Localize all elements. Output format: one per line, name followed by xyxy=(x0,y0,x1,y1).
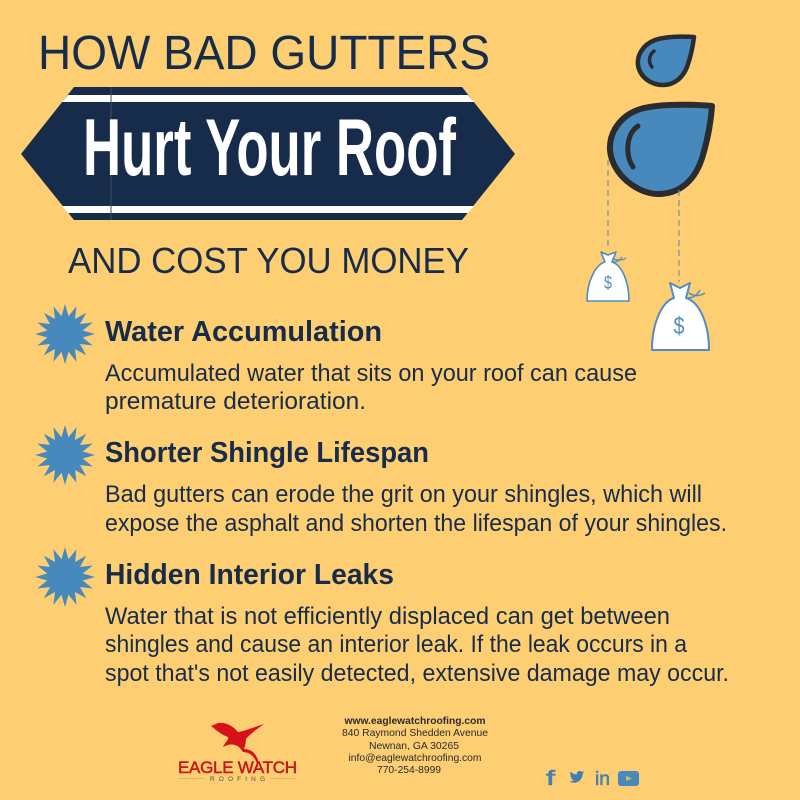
dollar sign small: $ xyxy=(604,273,612,293)
body text: Accumulated water that sits on your roof can cause xyxy=(105,360,637,387)
body text: expose the asphalt and shorten the lifespan of your shingles. xyxy=(105,510,727,537)
heading: Hidden Interior Leaks xyxy=(105,559,394,591)
dashed string right xyxy=(678,190,680,282)
social icons xyxy=(546,768,639,790)
icon: starburst xyxy=(35,304,95,364)
heading: Water Accumulation xyxy=(105,316,382,348)
icon: linkedin: in xyxy=(595,769,610,790)
banner xyxy=(21,87,515,220)
icon: facebook: f xyxy=(546,768,556,790)
contact details xyxy=(342,716,488,776)
item: shorter shingle lifespan xyxy=(35,425,727,537)
dollar sign large: $ xyxy=(674,313,684,340)
contact details: 770-254-8999 xyxy=(377,765,441,776)
body text: Water that is not efficiently displaced can get between xyxy=(105,603,670,630)
body text: Bad gutters can erode the grit on your shingles, which will xyxy=(105,481,702,508)
icon: starburst xyxy=(35,547,95,607)
body text: premature deterioration. xyxy=(105,388,366,415)
logo wordmark: EAGLE WATCH xyxy=(178,758,297,777)
icon: youtube xyxy=(618,771,639,786)
contact details: www.eaglewatchroofing.com xyxy=(344,716,486,727)
heading: Shorter Shingle Lifespan xyxy=(105,437,429,469)
body text xyxy=(105,360,637,415)
icon: small money bag xyxy=(587,252,629,301)
logo tagline: ROOFING xyxy=(210,776,265,783)
item: water accumulation xyxy=(35,304,637,415)
body text xyxy=(105,603,729,687)
banner title text: Hurt Your Roof xyxy=(83,103,457,193)
title: how bad gutters: HOW BAD GUTTERS xyxy=(38,27,490,80)
body text xyxy=(105,481,727,537)
logo: eagle watch roofing xyxy=(178,723,297,783)
icon: starburst xyxy=(35,425,95,485)
icon: small water drop xyxy=(638,37,694,85)
contact details: info@eaglewatchroofing.com xyxy=(348,753,482,764)
body text: spot that's not easily detected, extensive damage may occur. xyxy=(105,660,729,687)
icon: large water drop xyxy=(610,105,712,194)
icon: eagle xyxy=(211,723,264,768)
contact details: 840 Raymond Shedden Avenue xyxy=(342,728,488,739)
item: hidden interior leaks xyxy=(35,547,729,687)
icon: large money bag xyxy=(652,283,709,350)
contact details: Newnan, GA 30265 xyxy=(369,741,459,752)
dashed string left xyxy=(607,160,609,250)
body text: shingles and cause an interior leak. If the leak occurs in a xyxy=(105,631,688,658)
subtitle: and cost you money: AND COST YOU MONEY xyxy=(68,240,469,281)
icon: twitter xyxy=(570,771,584,783)
